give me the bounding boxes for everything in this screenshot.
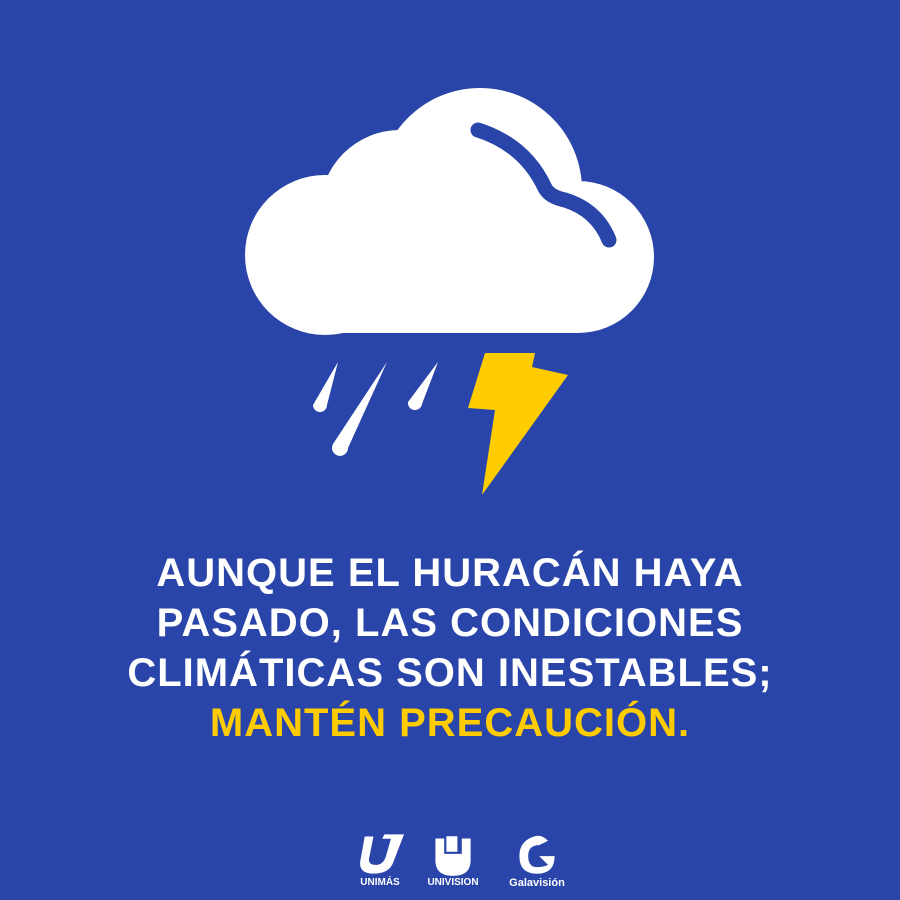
main message: AUNQUE EL HURACÁN HAYA — [156, 551, 744, 595]
logo: Galavisión — [509, 836, 565, 889]
weather icon — [245, 88, 654, 495]
main message — [127, 550, 773, 745]
main message: PASADO, LAS CONDICIONES — [157, 601, 743, 645]
main message: MANTÉN PRECAUCIÓN. — [210, 701, 690, 745]
logo: UniMás — [360, 834, 404, 888]
icon: lightning bolt — [468, 353, 568, 495]
logo: Galavisión: Galavisión — [509, 877, 565, 889]
icon: rain drops — [313, 362, 438, 456]
logo: Univision — [427, 836, 479, 888]
logo: Univision: UNIVISION — [427, 877, 479, 888]
logo: UniMás: UNIMÁS — [360, 877, 400, 888]
main message: CLIMÁTICAS SON INESTABLES; — [127, 651, 773, 695]
icon: cloud — [245, 88, 654, 335]
